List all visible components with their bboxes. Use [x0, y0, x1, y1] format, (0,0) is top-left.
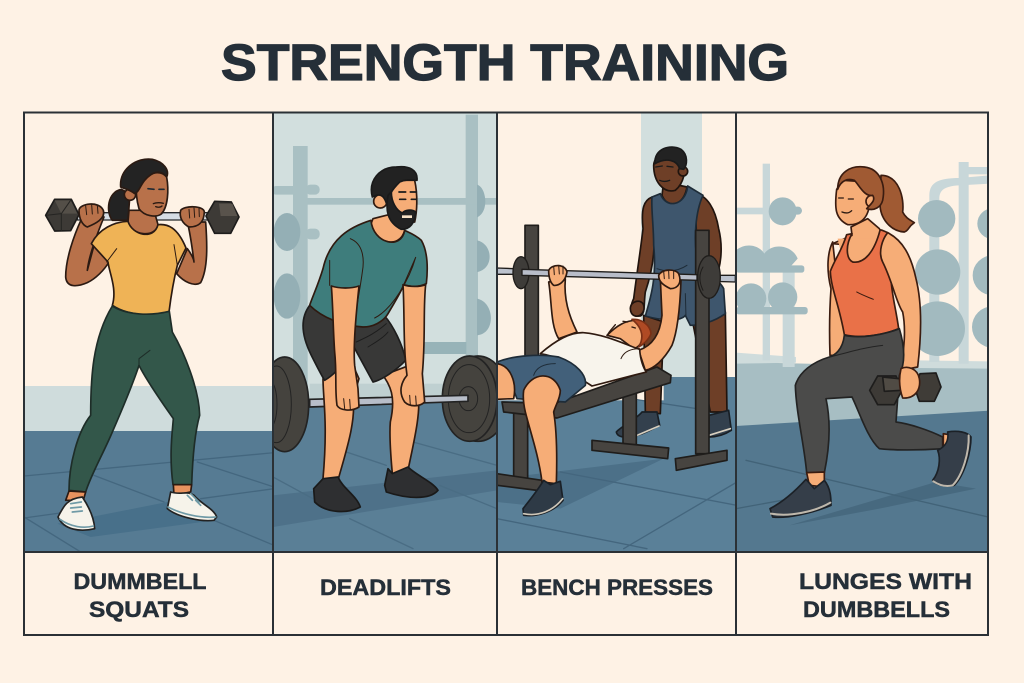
figure: spotter [616, 147, 731, 437]
label: dummbell squats [74, 569, 207, 622]
barbell [497, 256, 735, 298]
label: bench presses: BENCH PRESSES [521, 575, 713, 600]
icon: dumbbell [870, 367, 941, 405]
panel: lunges with dumbbells [737, 162, 987, 551]
title: STRENGTH TRAINING [221, 34, 789, 91]
label: deadlifts: DEADLIFTS [320, 575, 451, 600]
panel: dummbell squats [25, 158, 272, 551]
label: lunges with dumbbells: LUNGES WITH [799, 569, 972, 594]
gym rack background [273, 115, 498, 399]
bench and racks [497, 225, 727, 491]
gym rack background [736, 162, 989, 367]
icon: dumbbell [46, 199, 239, 233]
figure: lifter on bench [497, 279, 681, 516]
panel frame [24, 112, 988, 635]
label: lunges with dumbbells [799, 569, 972, 622]
label: dummbell squats: DUMMBELL [74, 569, 207, 594]
panel: deadlifts [274, 114, 496, 551]
figure: woman squatting [58, 159, 217, 530]
barbell [261, 356, 509, 452]
figure: woman lunging [770, 167, 971, 517]
label: lunges with dumbbells: DUMBBELLS [803, 597, 950, 622]
label: dummbell squats: SQUATS [89, 597, 189, 622]
panel: bench presses [497, 112, 737, 552]
figure: man deadlifting [303, 167, 438, 512]
